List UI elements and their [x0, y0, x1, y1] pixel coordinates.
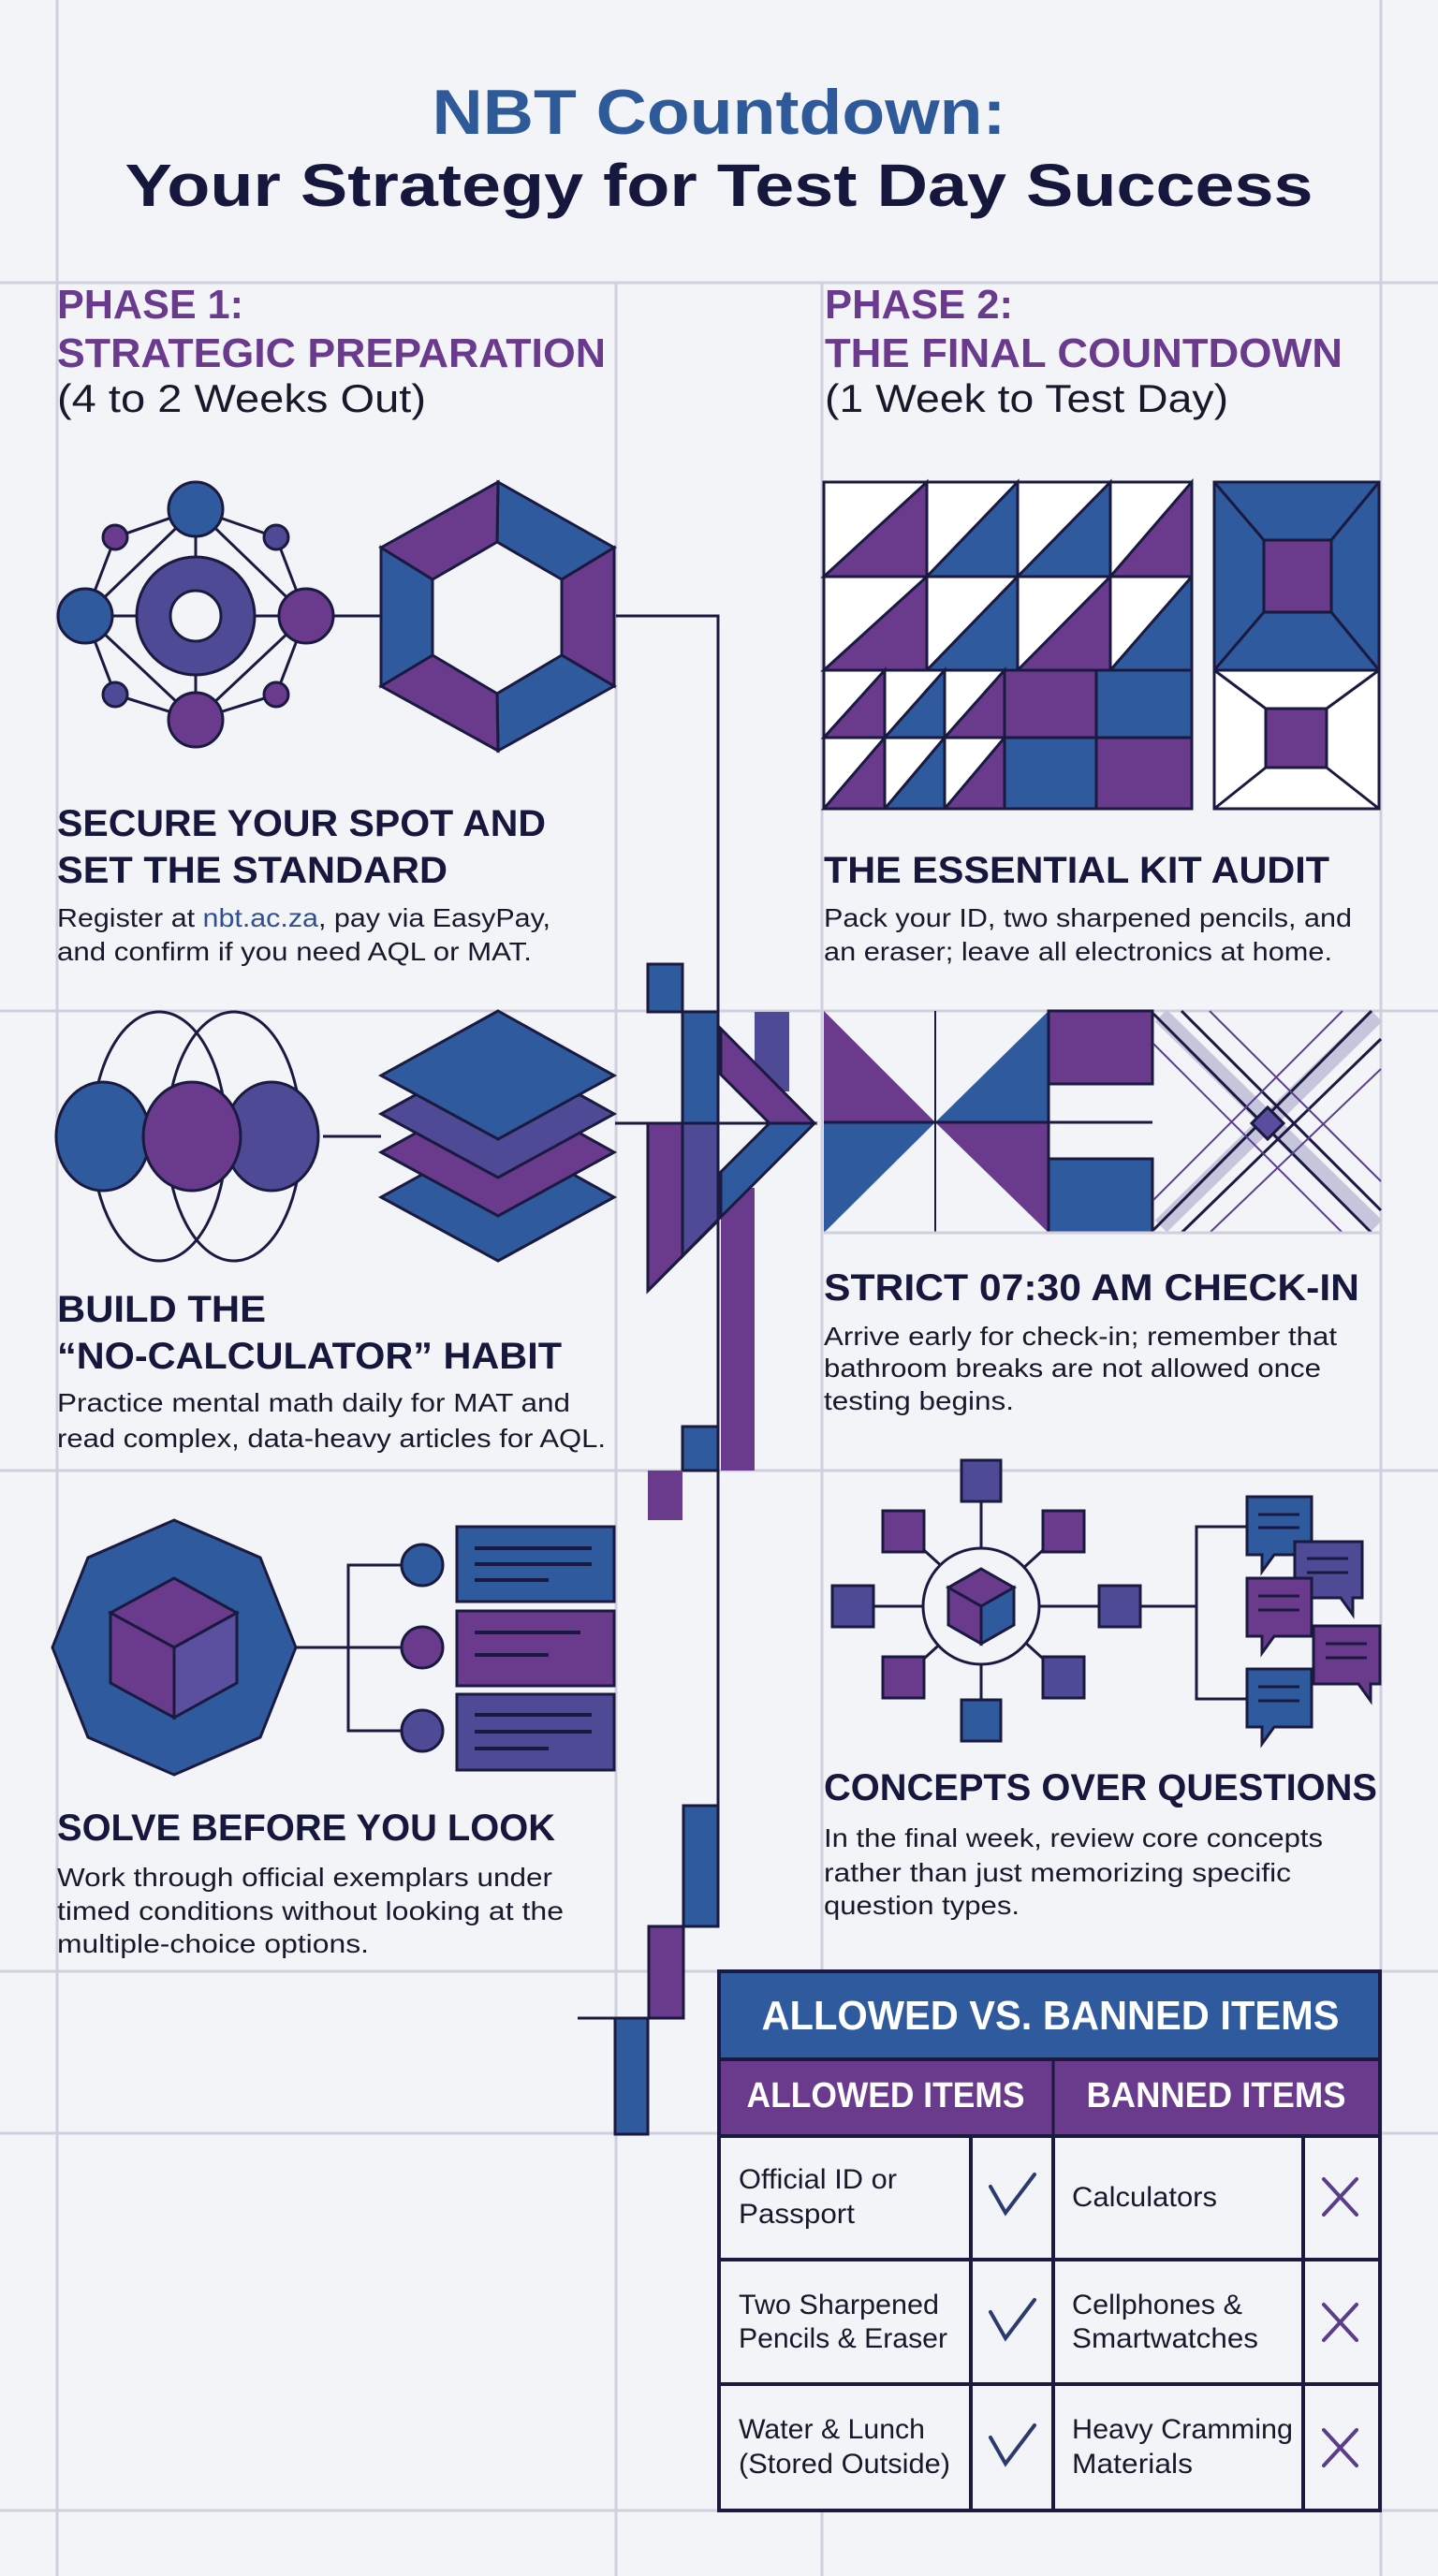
text: solve before you look: [57, 1808, 564, 1958]
text: no-calculator habit: “NO-CALCULATOR” HABIT: [57, 1336, 562, 1377]
text: concepts over questions: rather than just memorizing specific: [824, 1858, 1291, 1887]
text: no-calculator habit: Practice mental math daily for MAT and: [57, 1388, 570, 1417]
phase 2 heading: (1 Week to Test Day): [825, 376, 1228, 420]
table rows text: Cellphones &: [1072, 2290, 1242, 2320]
table title band: [719, 1971, 1380, 2059]
text: concepts over questions: CONCEPTS OVER QUESTIONS: [824, 1767, 1377, 1808]
phase 2 heading: PHASE 2:: [825, 282, 1013, 328]
text: no-calculator habit: read complex, data-heavy articles for AQL.: [57, 1424, 606, 1453]
text: solve before you look: timed conditions without looking at the: [57, 1896, 564, 1925]
text: concepts over questions: question types.: [824, 1891, 1020, 1920]
text: no-calculator habit: [57, 1289, 606, 1453]
text: essential kit audit: [824, 850, 1352, 966]
icon: hexagon ring: [381, 482, 614, 751]
title: [125, 77, 1313, 219]
text: strict check-in: bathroom breaks are not allowed once: [824, 1354, 1321, 1383]
icon: concept hub with speech bubbles: [832, 1460, 1380, 1744]
table rows text: Pencils & Eraser: [739, 2323, 947, 2354]
icon: check marks: [990, 2174, 1034, 2464]
table rows text: Heavy Cramming: [1072, 2414, 1293, 2445]
text: strict check-in: testing begins.: [824, 1386, 1014, 1415]
table rows text: Materials: [1072, 2449, 1193, 2480]
table title band: ALLOWED VS. BANNED ITEMS: [762, 1993, 1339, 2039]
text: essential kit audit: an eraser; leave all electronics at home.: [824, 937, 1332, 966]
text: no-calculator habit: BUILD THE: [57, 1289, 266, 1330]
icon: kit grid: [824, 482, 1379, 809]
table rows text: Calculators: [1072, 2182, 1217, 2213]
table rows text: Smartwatches: [1072, 2323, 1258, 2354]
connector timeline: [578, 616, 814, 2134]
title: Your Strategy for Test Day Success: [125, 152, 1313, 219]
icon: octagon cube with options: [52, 1520, 614, 1775]
table rows text: Two Sharpened: [739, 2290, 939, 2320]
text: essential kit audit: Pack your ID, two sharpened pencils, and: [824, 903, 1352, 932]
phase 2 heading: [825, 282, 1343, 420]
phase 1 heading: PHASE 1:: [57, 282, 243, 328]
icon: cross marks: [1324, 2179, 1357, 2466]
title: NBT Countdown:: [433, 77, 1005, 148]
phase 1 heading: (4 to 2 Weeks Out): [57, 376, 426, 420]
table column headers: [719, 2059, 1380, 2136]
table rows text: Official ID or: [739, 2164, 897, 2195]
text: solve before you look: Work through official exemplars under: [57, 1863, 552, 1892]
text: strict check-in: STRICT 07:30 AM CHECK-IN: [824, 1267, 1359, 1309]
icon: geometric check-in pattern: [824, 1011, 1381, 1233]
phase 1 heading: [57, 282, 606, 420]
text: strict check-in: Arrive early for check-in; remember that: [824, 1322, 1337, 1351]
text: secure your spot: SECURE YOUR SPOT AND: [57, 803, 546, 844]
table: allowed vs banned items: [719, 1971, 1380, 2510]
text: solve before you look: multiple-choice options.: [57, 1929, 369, 1958]
icon: network node: [58, 482, 381, 747]
phase 2 heading: THE FINAL COUNTDOWN: [825, 330, 1343, 376]
table column headers: BANNED ITEMS: [1086, 2076, 1346, 2115]
text: essential kit audit: THE ESSENTIAL KIT AUDIT: [824, 850, 1329, 891]
table rows text: Water & Lunch: [739, 2414, 925, 2445]
table column headers: ALLOWED ITEMS: [747, 2076, 1024, 2115]
text: secure your spot: SET THE STANDARD: [57, 850, 448, 891]
table rows text: [739, 2164, 1293, 2480]
phase 1 heading: STRATEGIC PREPARATION: [57, 330, 606, 376]
table rows text: Passport: [739, 2199, 856, 2230]
table rows text: (Stored Outside): [739, 2449, 950, 2480]
text: solve before you look: SOLVE BEFORE YOU LOOK: [57, 1808, 555, 1849]
icon: layered diamonds: [381, 1011, 614, 1261]
text: secure your spot: Register at nbt.ac.za , pay via EasyPay,: [57, 903, 550, 932]
text: strict check-in: [824, 1267, 1359, 1415]
text: secure your spot: [57, 803, 550, 966]
text: concepts over questions: [824, 1767, 1377, 1920]
text: secure your spot: and confirm if you need AQL or MAT.: [57, 937, 532, 966]
text: concepts over questions: In the final week, review core concepts: [824, 1823, 1323, 1852]
icon: venn circles: [56, 1012, 381, 1261]
